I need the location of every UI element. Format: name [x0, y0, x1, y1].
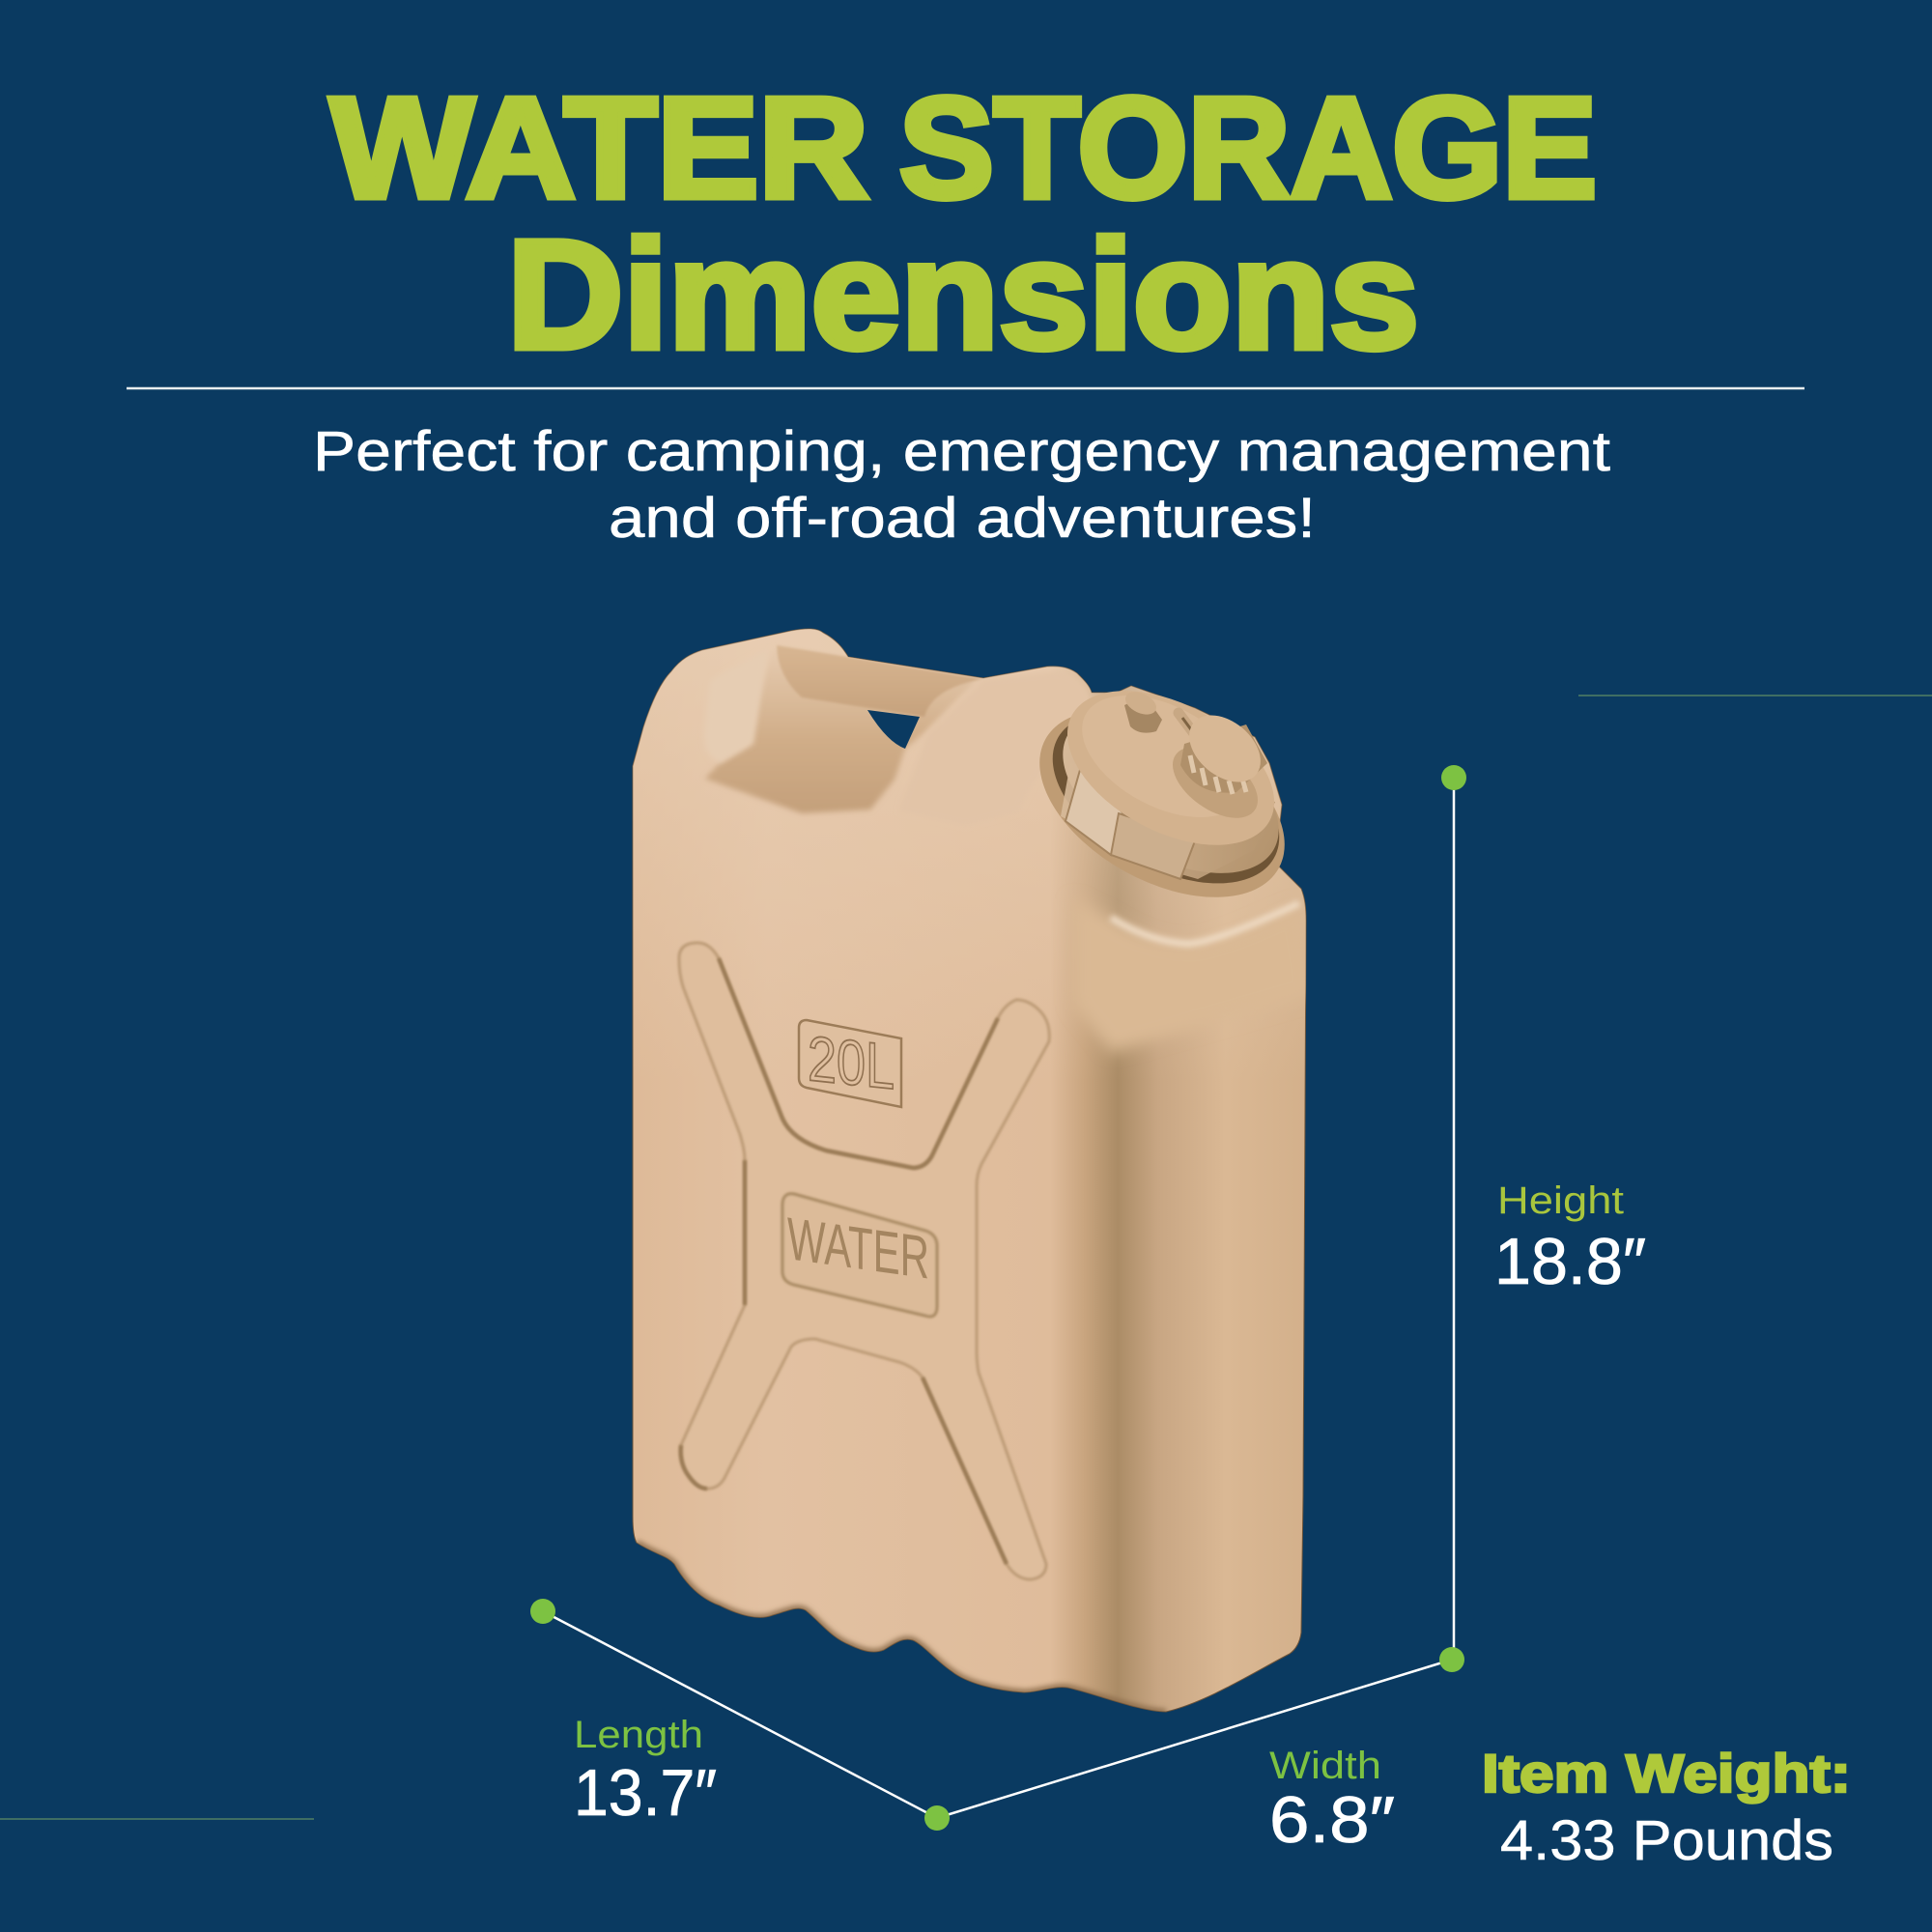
- width label: Width: [1269, 1745, 1381, 1787]
- length label: Length: [574, 1714, 703, 1756]
- embossed X panel: [679, 943, 1049, 1579]
- spout cap: [1160, 702, 1273, 833]
- cap assembly: [1009, 659, 1316, 936]
- item weight: [1482, 1743, 1851, 1872]
- cap tabs: [1065, 763, 1125, 855]
- small vent cap: [1122, 688, 1162, 733]
- width label: [1269, 1745, 1395, 1857]
- label: WATER: WATER: [787, 1206, 929, 1293]
- height label: 18.8″: [1494, 1225, 1646, 1298]
- subtitle: [313, 420, 1610, 550]
- grip recess: [705, 666, 970, 815]
- length label: 13.7″: [574, 1756, 717, 1830]
- label: WATER: [782, 1194, 937, 1317]
- length label: [574, 1714, 717, 1830]
- title: [330, 69, 1597, 381]
- cap skirt: [1036, 677, 1306, 907]
- cap base ring: [1009, 671, 1316, 936]
- title: Dimensions: [507, 208, 1419, 381]
- cap top: [1042, 659, 1299, 877]
- handle hole: [867, 710, 920, 749]
- title: WATER: [330, 69, 868, 228]
- bottom shading: [637, 1543, 1166, 1712]
- shoulder: [1072, 898, 1314, 1053]
- dimension dots: [530, 765, 1466, 1831]
- handle bar: [777, 645, 983, 717]
- left pillar: [711, 687, 761, 764]
- item weight: Item Weight:: [1482, 1743, 1851, 1804]
- title: STORAGE: [899, 69, 1597, 228]
- strap: [1179, 713, 1196, 736]
- item weight: 4.33 Pounds: [1500, 1809, 1833, 1872]
- water jug illustration: [628, 618, 1323, 1712]
- right pillar: [982, 674, 1092, 705]
- height label: Height: [1497, 1179, 1624, 1222]
- subtitle: and off-road adventures!: [609, 487, 1316, 550]
- label: 20L: 20L: [808, 1023, 895, 1103]
- subtitle: Perfect for camping, emergency management: [313, 420, 1610, 483]
- height label: [1494, 1179, 1646, 1298]
- dimension lines: [543, 778, 1454, 1818]
- width label: 6.8″: [1269, 1783, 1395, 1857]
- jug body: [633, 629, 1306, 1712]
